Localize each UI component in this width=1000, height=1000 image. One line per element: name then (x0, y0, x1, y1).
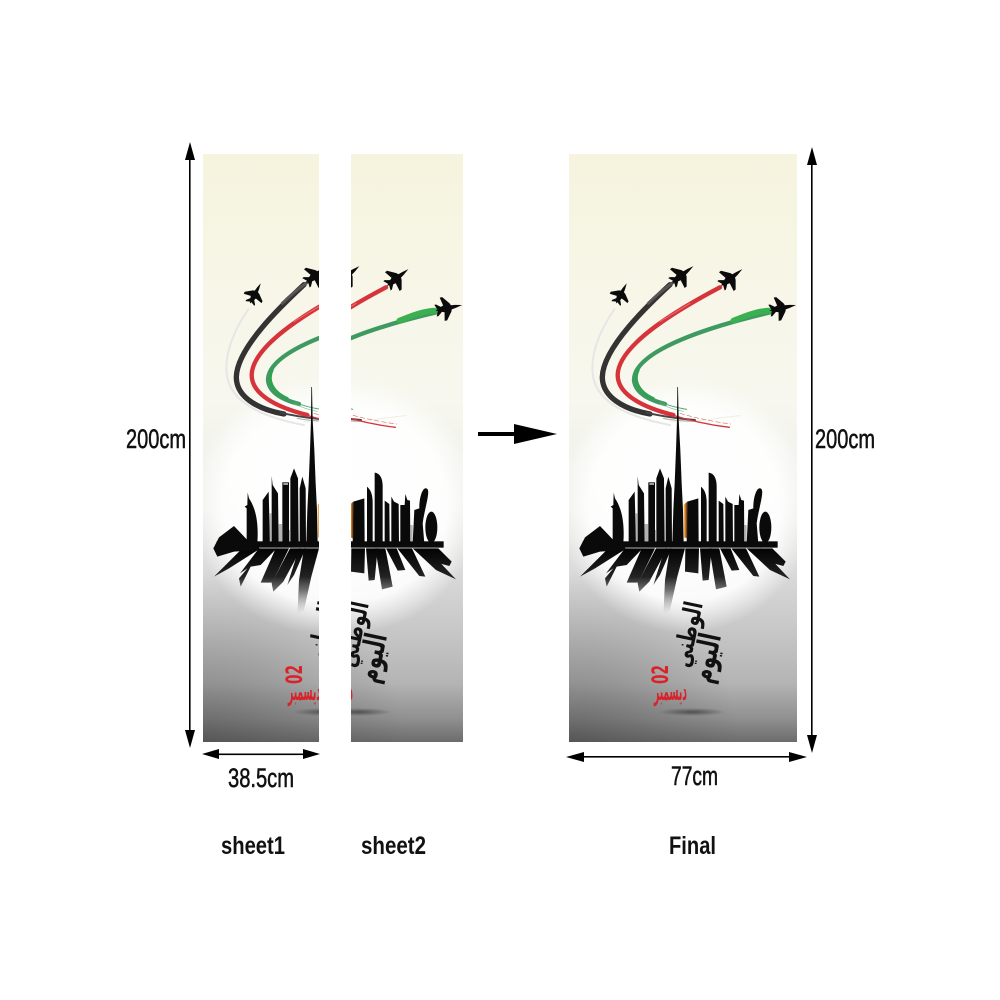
calligraphy: sheet 2: اليوم (350, 630, 395, 686)
label: sheet width: 38.5cm (228, 763, 294, 793)
label: final width: 77cm (671, 761, 718, 791)
arrow: assembly direction (478, 424, 557, 444)
arrow: sheet width (202, 749, 320, 759)
label: final height: 200cm (815, 424, 875, 454)
label: sheet2: sheet2 (361, 832, 426, 860)
calligraphy: sheet 1: ديسمبر (287, 677, 321, 707)
calligraphy: sheet 1: 02 (283, 665, 308, 684)
calligraphy: sheet 2: الوطني (334, 599, 376, 670)
calligraphy: sheet 1 (285, 601, 319, 706)
calligraphy: final: 02 (649, 665, 674, 684)
calligraphy: final: الوطني (668, 599, 710, 670)
label: sheet height: 200cm (126, 424, 186, 454)
label: sheet1: sheet1 (221, 832, 285, 860)
calligraphy: sheet 1: اليوم (318, 630, 363, 686)
calligraphy: sheet 1: الوطني (302, 599, 344, 670)
panel: sheet 1 (203, 154, 319, 742)
arrow: final height (807, 147, 817, 753)
arrow: final width (566, 752, 807, 762)
panel: sheet 2 (351, 154, 463, 742)
arrow: sheet height (185, 142, 195, 748)
panel: final door (569, 154, 799, 742)
calligraphy: sheet 2: ديسمبر (319, 677, 353, 707)
calligraphy: final: اليوم (684, 630, 729, 686)
label: final: Final (669, 832, 716, 860)
calligraphy: final (649, 599, 729, 707)
calligraphy: sheet 2 (351, 601, 389, 700)
calligraphy: final: ديسمبر (653, 677, 687, 707)
